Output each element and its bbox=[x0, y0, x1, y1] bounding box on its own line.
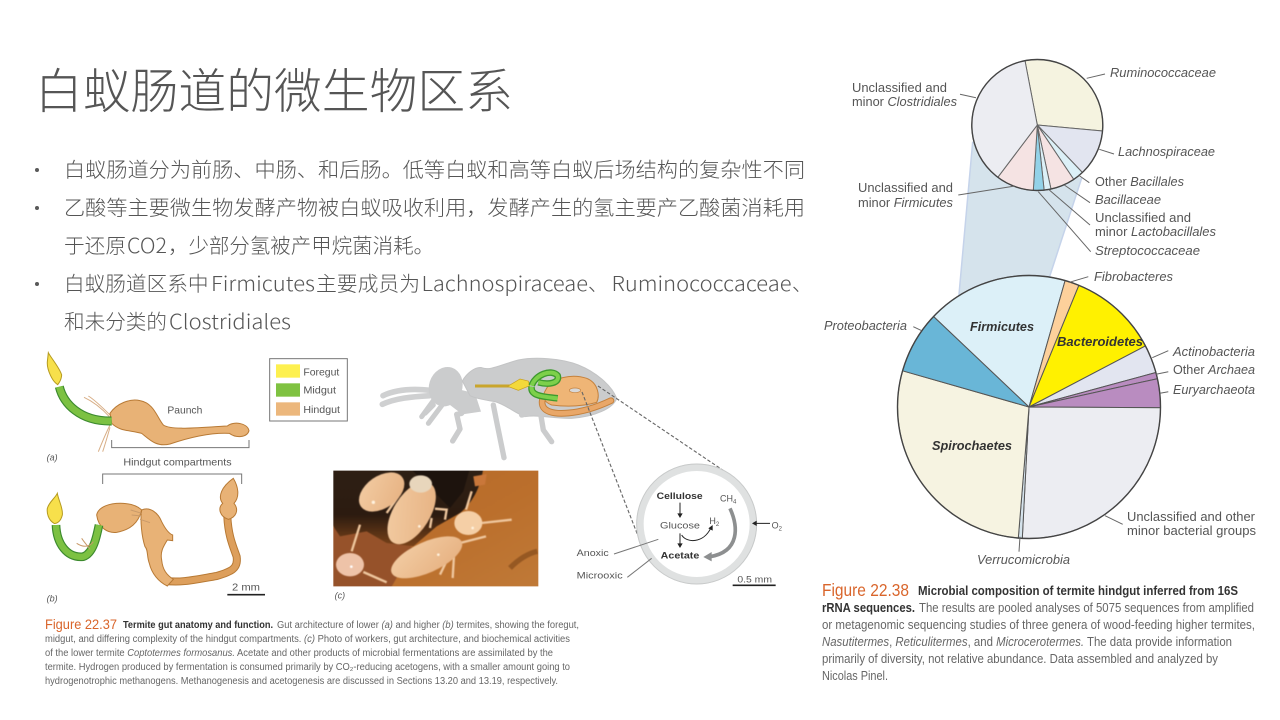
pie labels bbox=[824, 66, 1256, 567]
slice: Bacillaceae bbox=[1037, 125, 1074, 189]
caption: figure 22.38: rRNA sequences. bbox=[822, 601, 915, 615]
legend: Midgut bbox=[303, 386, 336, 397]
gut labels: Paunch bbox=[167, 406, 203, 417]
pie labels: Euryarchaeota bbox=[1173, 383, 1255, 397]
hindgut cross-section: 2 bbox=[779, 526, 783, 532]
(c) label: (c) bbox=[335, 591, 345, 601]
pie labels: Bacteroidetes bbox=[1057, 335, 1143, 349]
figure 22.37: gut diagrams bbox=[47, 353, 347, 604]
caption: figure 22.37: Gut architecture of lower (a) and higher (b) termites, showing the foregut, bbox=[277, 620, 579, 631]
hindgut cross-section: 2 bbox=[716, 522, 720, 528]
slice: minor Clostridiales bbox=[972, 61, 1037, 177]
pie labels: minor Firmicutes bbox=[858, 196, 953, 210]
pie labels: Unclassified and bbox=[852, 81, 947, 95]
figure 22.37 annotations bbox=[335, 464, 783, 601]
hindgut cross-section: Glucose bbox=[660, 520, 700, 530]
pie labels: minor bacterial groups bbox=[1127, 524, 1256, 538]
slice: Streptococcaceae bbox=[1033, 125, 1044, 190]
caption: figure 22.37 bbox=[45, 617, 579, 687]
bullet 2 bbox=[35, 191, 805, 259]
bullet 3: Clostridiales bbox=[169, 305, 291, 335]
slice: Ruminococcaceae bbox=[1025, 60, 1103, 131]
slice: Actinobacteria bbox=[1029, 346, 1156, 407]
pie labels: Bacillaceae bbox=[1095, 193, 1161, 207]
caption: figure 22.38: Figure 22.38 bbox=[822, 580, 909, 600]
small pie outline bbox=[972, 60, 1103, 190]
bullet 2: CO2 bbox=[127, 229, 167, 259]
caption: figure 22.38: primarily of diversity, not relative abundance. Data assembled and analyzed by bbox=[822, 652, 1219, 666]
termite illustration bbox=[382, 358, 617, 458]
pie labels: Proteobacteria bbox=[824, 319, 907, 333]
bracket: hindgut compartments bbox=[103, 440, 249, 484]
caption: figure 22.37: Figure 22.37 bbox=[45, 617, 117, 632]
pie labels: Firmicutes bbox=[970, 320, 1034, 334]
termite body bbox=[382, 358, 617, 458]
higher termite gut (b) bbox=[47, 478, 238, 586]
caption: figure 22.38: The results are pooled analyses of 5075 sequences from amplified bbox=[919, 601, 1254, 615]
slice: unclassified bbox=[1022, 407, 1160, 538]
slice: Proteobacteria bbox=[903, 316, 1029, 407]
hindgut cross-section: Anoxic bbox=[577, 548, 609, 558]
bullet list bbox=[35, 153, 812, 335]
caption: figure 22.37: Termite gut anatomy and function. bbox=[123, 620, 273, 631]
slice: Fibrobacteres bbox=[1029, 281, 1079, 407]
slice: minor Lactobacillales bbox=[1037, 125, 1051, 190]
pie labels: Other Bacillales bbox=[1095, 175, 1184, 189]
slice: Verrucomicrobia bbox=[1018, 407, 1029, 538]
bullet 3: Lachnospiraceae bbox=[422, 267, 588, 297]
bullet 2: 于还原 bbox=[64, 229, 126, 259]
hindgut cross-section: Acetate bbox=[661, 551, 699, 561]
zoom dashed lines bbox=[582, 386, 733, 541]
gut labels: (b) bbox=[47, 594, 58, 604]
gut labels: (a) bbox=[47, 453, 58, 463]
pie labels: Actinobacteria bbox=[1172, 345, 1255, 359]
bullet 3: 和未分类的 bbox=[64, 305, 167, 335]
hindgut cross-section: O bbox=[772, 520, 779, 530]
bullet 3: 主要成员为 bbox=[316, 267, 420, 297]
hindgut cross-section: 0.5 mm bbox=[737, 574, 772, 584]
hindgut cross-section: CH bbox=[720, 494, 733, 504]
caption: figure 22.38: Nicolas Pinel. bbox=[822, 669, 888, 683]
bullet 3: Firmicutes bbox=[211, 267, 315, 297]
bullet 2: 乙酸等主要微生物发酵产物被白蚁吸收利用，发酵产生的氢主要产乙酸菌消耗用 bbox=[64, 191, 805, 221]
bullet 3: 、 bbox=[588, 267, 608, 297]
bullet 1: 白蚁肠道分为前肠、中肠、和后肠。低等白蚁和高等白蚁后场结构的复杂性不同 bbox=[64, 153, 805, 183]
caption: figure 22.37: hydrogenotrophic methanogens. Methanogenesis and acetogenesis are discussed in Sections 13.20 and 13.19, respectively. bbox=[45, 676, 558, 687]
pie labels: minor Clostridiales bbox=[852, 95, 957, 109]
legend: Foregut bbox=[303, 367, 339, 378]
caption: figure 22.38: or metagenomic sequencing studies of three genera of wood-feeding higher termites, bbox=[822, 618, 1255, 632]
hindgut cross-section: H bbox=[709, 516, 716, 526]
big pie: bacterial phyla bbox=[898, 276, 1161, 538]
caption: figure 22.37: termite. Hydrogen produced by fermentation is consumed primarily by CO₂-reducing acetogens, with a smaller amount going to bbox=[45, 662, 570, 673]
pie labels: Unclassified and bbox=[1095, 211, 1191, 225]
slice: minor Firmicutes bbox=[998, 125, 1037, 190]
bullet 3: 、 bbox=[792, 267, 812, 297]
gut labels: Hindgut compartments bbox=[123, 457, 232, 468]
pie leader lines bbox=[913, 74, 1168, 552]
bullet 3: 白蚁肠道区系中 bbox=[64, 267, 208, 297]
pie labels: Lachnospiraceae bbox=[1118, 145, 1215, 159]
slice: Other Bacillales bbox=[1037, 125, 1082, 179]
pie labels: Unclassified and bbox=[858, 181, 953, 195]
termite gut bbox=[475, 373, 611, 413]
big pie outline bbox=[898, 276, 1160, 538]
pie labels: Other Archaea bbox=[1173, 363, 1255, 377]
gut labels bbox=[47, 406, 260, 604]
pie labels: Spirochaetes bbox=[932, 439, 1012, 453]
pie labels: Verrucomicrobia bbox=[977, 553, 1070, 567]
bullet 3 bbox=[35, 267, 812, 335]
zoom band between pies bbox=[958, 142, 1082, 300]
pie labels: Ruminococcaceae bbox=[1110, 66, 1216, 80]
gut labels: 2 mm bbox=[232, 583, 260, 594]
bullet 3: Ruminococcaceae bbox=[612, 267, 792, 297]
hindgut cross-section bbox=[577, 464, 783, 585]
slice: Firmicutes bbox=[934, 276, 1065, 407]
slice: Spirochaetes bbox=[898, 371, 1029, 538]
caption: figure 22.37: midgut, and differing complexity of the hindgut compartments. (c) Photo of workers, gut architecture, and biochemical activities bbox=[45, 634, 570, 645]
pie labels: Fibrobacteres bbox=[1094, 270, 1173, 284]
legend: Hindgut bbox=[303, 405, 340, 416]
slice: Lachnospiraceae bbox=[1037, 125, 1102, 172]
scale bar bbox=[227, 592, 265, 597]
legend bbox=[270, 359, 347, 421]
hindgut cross-section: 4 bbox=[733, 500, 737, 506]
title: 白蚁肠道的微生物区系 bbox=[35, 52, 513, 122]
slice: Other Archaea bbox=[1029, 372, 1157, 407]
hindgut cross-section: Microoxic bbox=[577, 571, 623, 581]
caption: figure 22.37: of the lower termite Coptotermes formosanus. Acetate and other products of microbial fermentations are assimilated by the bbox=[45, 648, 553, 659]
caption: figure 22.38: Nasutitermes, Reticulitermes, and Microcerotermes. The data provide information bbox=[822, 635, 1232, 649]
caption: figure 22.38 bbox=[822, 580, 1255, 683]
pie labels: minor Lactobacillales bbox=[1095, 225, 1216, 239]
photo of termite workers bbox=[333, 470, 538, 586]
caption: figure 22.38: Microbial composition of termite hindgut inferred from 16S bbox=[918, 584, 1238, 598]
hindgut cross-section: Cellulose bbox=[657, 491, 703, 501]
pie labels: Unclassified and other bbox=[1127, 510, 1255, 524]
pie labels: Streptococcaceae bbox=[1095, 244, 1200, 258]
slice: Bacteroidetes bbox=[1029, 285, 1146, 407]
slice: Euryarchaeota bbox=[1029, 379, 1161, 408]
small pie: firmicutes composition bbox=[972, 60, 1103, 190]
lower termite gut (a) bbox=[47, 353, 249, 452]
bullet 2: ，少部分氢被产甲烷菌消耗。 bbox=[168, 229, 434, 259]
